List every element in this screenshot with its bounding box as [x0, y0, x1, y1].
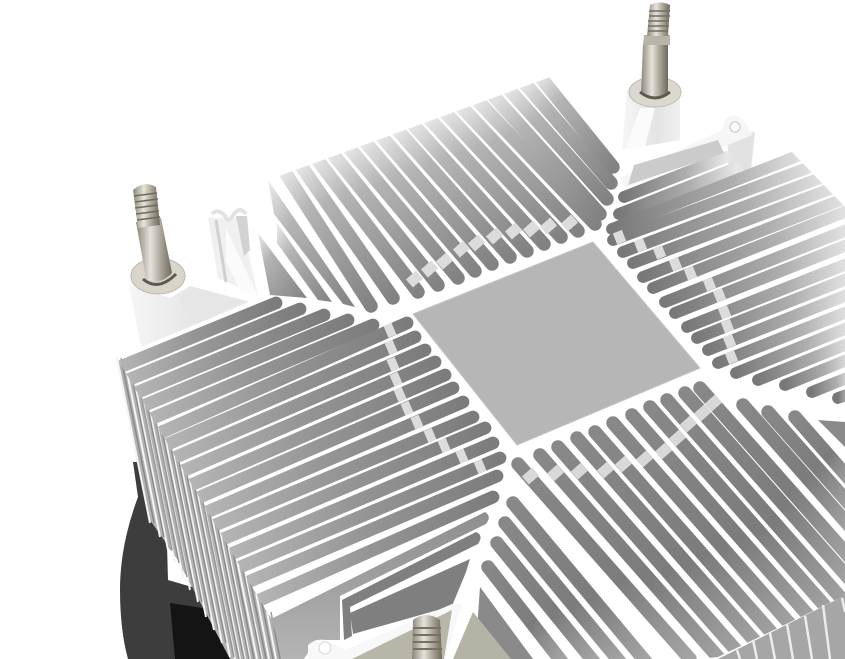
top quadrant fin slots — [281, 73, 613, 306]
extruded fin sides on the left — [117, 358, 300, 659]
left quadrant fin slots — [115, 303, 500, 603]
bottom quadrant fin slots — [488, 388, 845, 659]
brushed fin wall below the lowest long fin — [271, 512, 489, 659]
left mounting post column — [129, 285, 250, 347]
short bottom-left slots — [342, 532, 481, 640]
bottom quadrant wedge slots — [477, 420, 845, 659]
right corner hook — [620, 116, 755, 188]
right quadrant wide slot under arm — [628, 140, 724, 185]
right bolt and washer — [629, 2, 681, 107]
bottom bolt — [412, 615, 442, 659]
stepped fin faces around the centre block — [386, 219, 736, 480]
bottom mounting bracket — [308, 604, 511, 659]
left corner hook — [208, 210, 258, 296]
bottom-right fin sides — [718, 596, 845, 659]
left bolt and washer — [131, 184, 185, 294]
thermal pad — [413, 242, 700, 445]
fan housing — [120, 462, 250, 659]
right quadrant fin slots — [612, 151, 845, 398]
top quadrant short wedge slots — [258, 180, 355, 307]
right mounting post column — [622, 90, 680, 150]
